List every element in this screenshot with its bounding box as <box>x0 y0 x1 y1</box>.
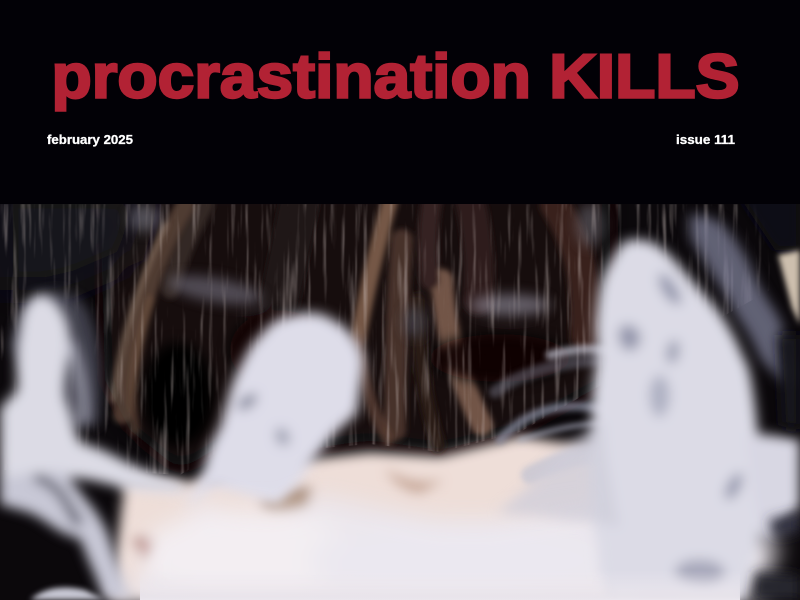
title: procrastination KILLS <box>52 42 739 112</box>
photo: dark hair with cigarette smoke <box>0 190 800 600</box>
smoke: bottom edge fill <box>140 574 740 600</box>
dark gaps, right edge <box>743 204 800 600</box>
hair base <box>0 190 800 600</box>
hair shine <box>129 203 604 447</box>
smoke wisp, bottom left <box>30 588 105 600</box>
masthead band <box>0 0 800 204</box>
issue date: february 2025 <box>47 133 133 147</box>
smoke: lower mass <box>125 495 780 600</box>
dark smoke halo, left <box>10 291 101 430</box>
hair strand texture <box>0 204 770 474</box>
smoke: right column <box>500 212 800 600</box>
smoke: wisps centre right <box>495 349 615 475</box>
brown hair strands <box>112 200 586 445</box>
light hair strand, far right <box>778 250 800 325</box>
skin <box>110 436 610 600</box>
smoke: centre plume <box>185 312 362 510</box>
issue number: issue 111 <box>676 133 735 147</box>
smoke: left plume <box>0 296 190 600</box>
